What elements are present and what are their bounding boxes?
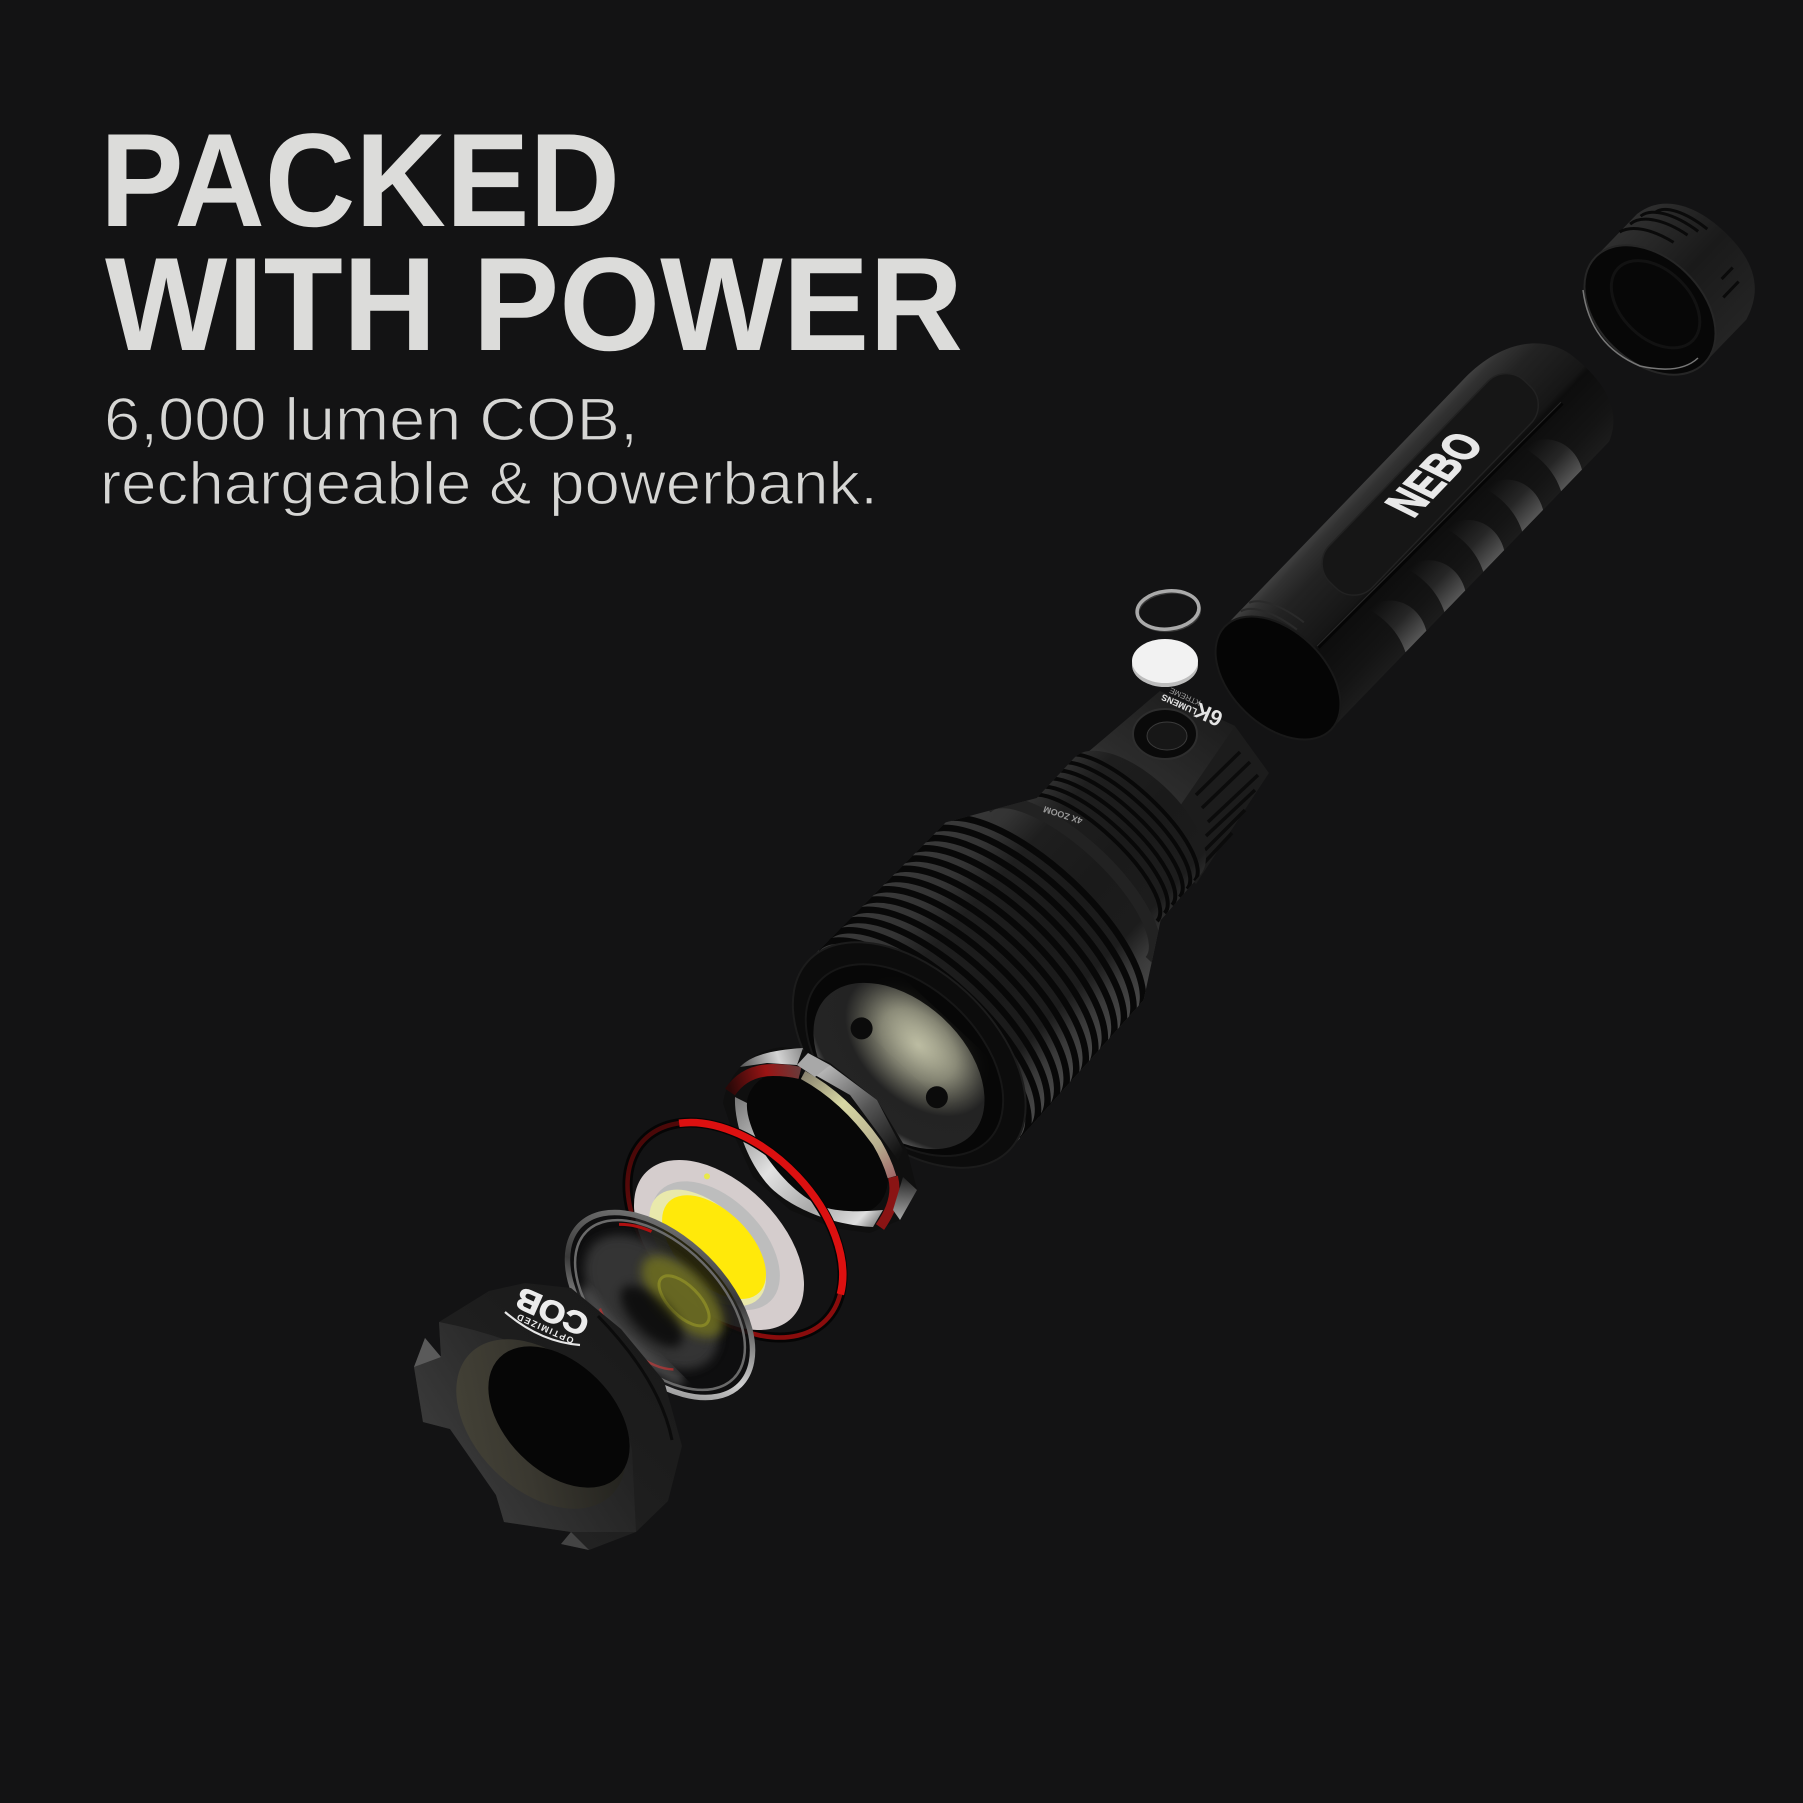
title: WITH POWER [105, 231, 963, 379]
COB logo: COB [510, 1280, 594, 1343]
bezel groove [598, 1316, 672, 1440]
head ridges [819, 753, 1200, 1138]
subtitle: rechargeable & powerbank. [100, 450, 878, 517]
title [100, 107, 963, 379]
COB logo: OPTIMIZED [514, 1311, 575, 1346]
reflector [782, 950, 1016, 1182]
red reflection arc [730, 1070, 800, 1092]
white switch disc [1132, 639, 1198, 687]
ring tab [797, 1053, 830, 1077]
COB LED module [602, 1128, 836, 1362]
title: PACKED [100, 107, 620, 255]
glass lens [530, 1175, 790, 1435]
yellow emitter [643, 1176, 785, 1318]
grip scallops [1381, 440, 1582, 652]
zoom marking: 4X ZOOM [1042, 804, 1084, 826]
front collar [750, 899, 1068, 1211]
lower wall [735, 1097, 883, 1227]
bezel crown [414, 1322, 636, 1532]
lumen label [1158, 683, 1226, 732]
silver retaining ring [719, 1046, 917, 1242]
neck block [1074, 683, 1269, 884]
yellow reflection arc [803, 1075, 892, 1177]
flashlight head [792, 751, 1206, 1168]
power button [1133, 709, 1197, 759]
bezel [414, 1280, 682, 1550]
o-ring [1135, 588, 1202, 634]
bezel inner wall [424, 1307, 658, 1541]
lumen label: LUMENS [1160, 692, 1199, 717]
tail cap [1559, 180, 1780, 400]
subtitle [100, 386, 878, 517]
upper right wall [815, 1065, 903, 1160]
grip recess [1311, 363, 1549, 606]
bezel opening [461, 1319, 657, 1515]
lumen label: 6K [1190, 697, 1226, 732]
battery tube [1216, 344, 1610, 738]
red o-ring [587, 1081, 884, 1378]
lumen label: XTREME [1168, 686, 1202, 707]
subtitle: 6,000 lumen COB, [104, 386, 638, 453]
top band [740, 1048, 803, 1067]
NEBO logo: NEBO [1374, 425, 1495, 524]
